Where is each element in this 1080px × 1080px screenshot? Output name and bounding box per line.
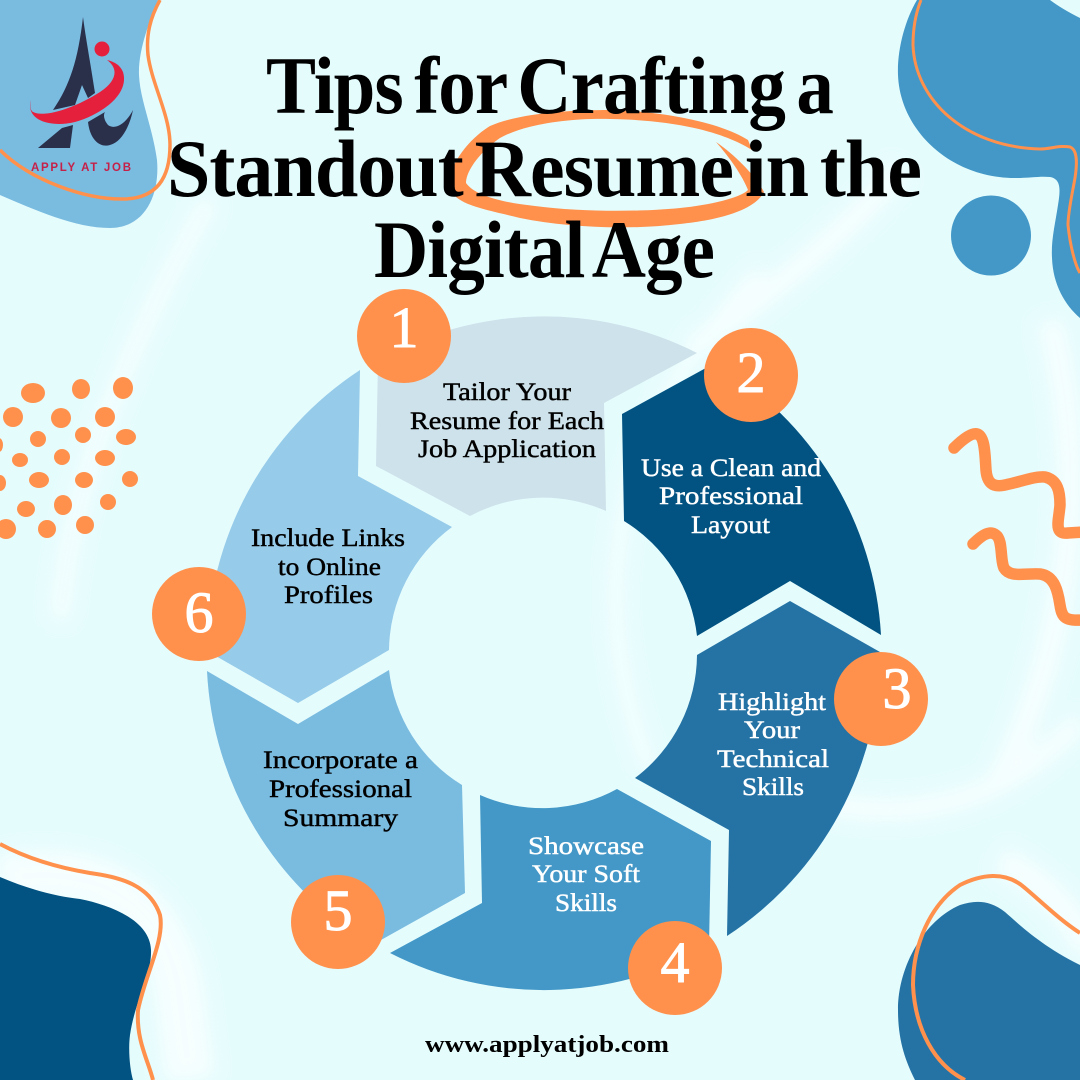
panel: step 3: Highlight xyxy=(718,689,826,716)
dots: orange cluster xyxy=(0,377,138,539)
blob: top left xyxy=(0,0,170,228)
badge: 4: 4 xyxy=(660,930,690,995)
title xyxy=(167,40,921,295)
badge: 1: 1 xyxy=(390,295,418,360)
panel: step 1 xyxy=(376,316,697,516)
panel: step 3 xyxy=(635,601,880,936)
panel: step 3: Technical xyxy=(717,746,829,773)
website url: www.applyatjob.com xyxy=(425,1032,669,1058)
badge: 1 xyxy=(357,289,451,383)
panel: step 4: Showcase xyxy=(528,833,644,860)
panel: step 4: Skills xyxy=(555,890,617,917)
highlight: hand-drawn oval around Resume xyxy=(449,110,764,227)
panel: step 1: Job Application xyxy=(418,436,597,463)
panel: step 4 xyxy=(390,789,711,990)
panel: step 1: Tailor Your xyxy=(443,379,572,406)
title: Tips for Crafting a xyxy=(266,40,833,131)
badge: 3: 3 xyxy=(882,656,912,721)
badge: 2: 2 xyxy=(736,340,766,405)
blob: bottom right xyxy=(898,876,1080,1080)
panel: step 6: Profiles xyxy=(284,582,373,609)
panel: step 6: Include Links xyxy=(251,525,405,552)
squiggles: right xyxy=(954,434,1080,620)
badge: 6 xyxy=(152,567,246,661)
panel: step 1: Resume for Each xyxy=(410,408,605,435)
logo: Apply At Job xyxy=(30,17,133,174)
logo: Apply At Job: APPLY AT JOB xyxy=(31,162,131,174)
badge: 2 xyxy=(704,328,798,422)
panel: step 2 xyxy=(622,363,881,636)
blob: top right xyxy=(898,0,1080,318)
panel: step 5 xyxy=(207,670,465,945)
badge: 6: 6 xyxy=(184,580,214,645)
title: Standout Resume in the xyxy=(167,123,921,214)
badge: 5: 5 xyxy=(324,878,352,943)
panel: step 6: to Online xyxy=(278,554,381,581)
blob: bottom left xyxy=(0,844,161,1080)
panel: step 3: Your xyxy=(744,717,801,744)
badge: 3 xyxy=(834,652,928,746)
title: Digital Age xyxy=(374,204,714,295)
panel: step 4: Your Soft xyxy=(532,861,640,888)
panel: step 2: Layout xyxy=(691,512,770,539)
panel: step 5: Professional xyxy=(269,776,412,803)
panel: step 3: Skills xyxy=(742,774,804,801)
panel: step 2: Use a Clean and xyxy=(641,455,822,482)
panel: step 5: Incorporate a xyxy=(263,747,418,774)
panel: step 6 xyxy=(207,370,452,703)
panel: step 5: Summary xyxy=(283,805,399,832)
panel: step 2: Professional xyxy=(659,483,803,510)
badge: 5 xyxy=(291,875,385,969)
circle: top right xyxy=(951,196,1031,276)
badge: 4 xyxy=(628,921,722,1015)
